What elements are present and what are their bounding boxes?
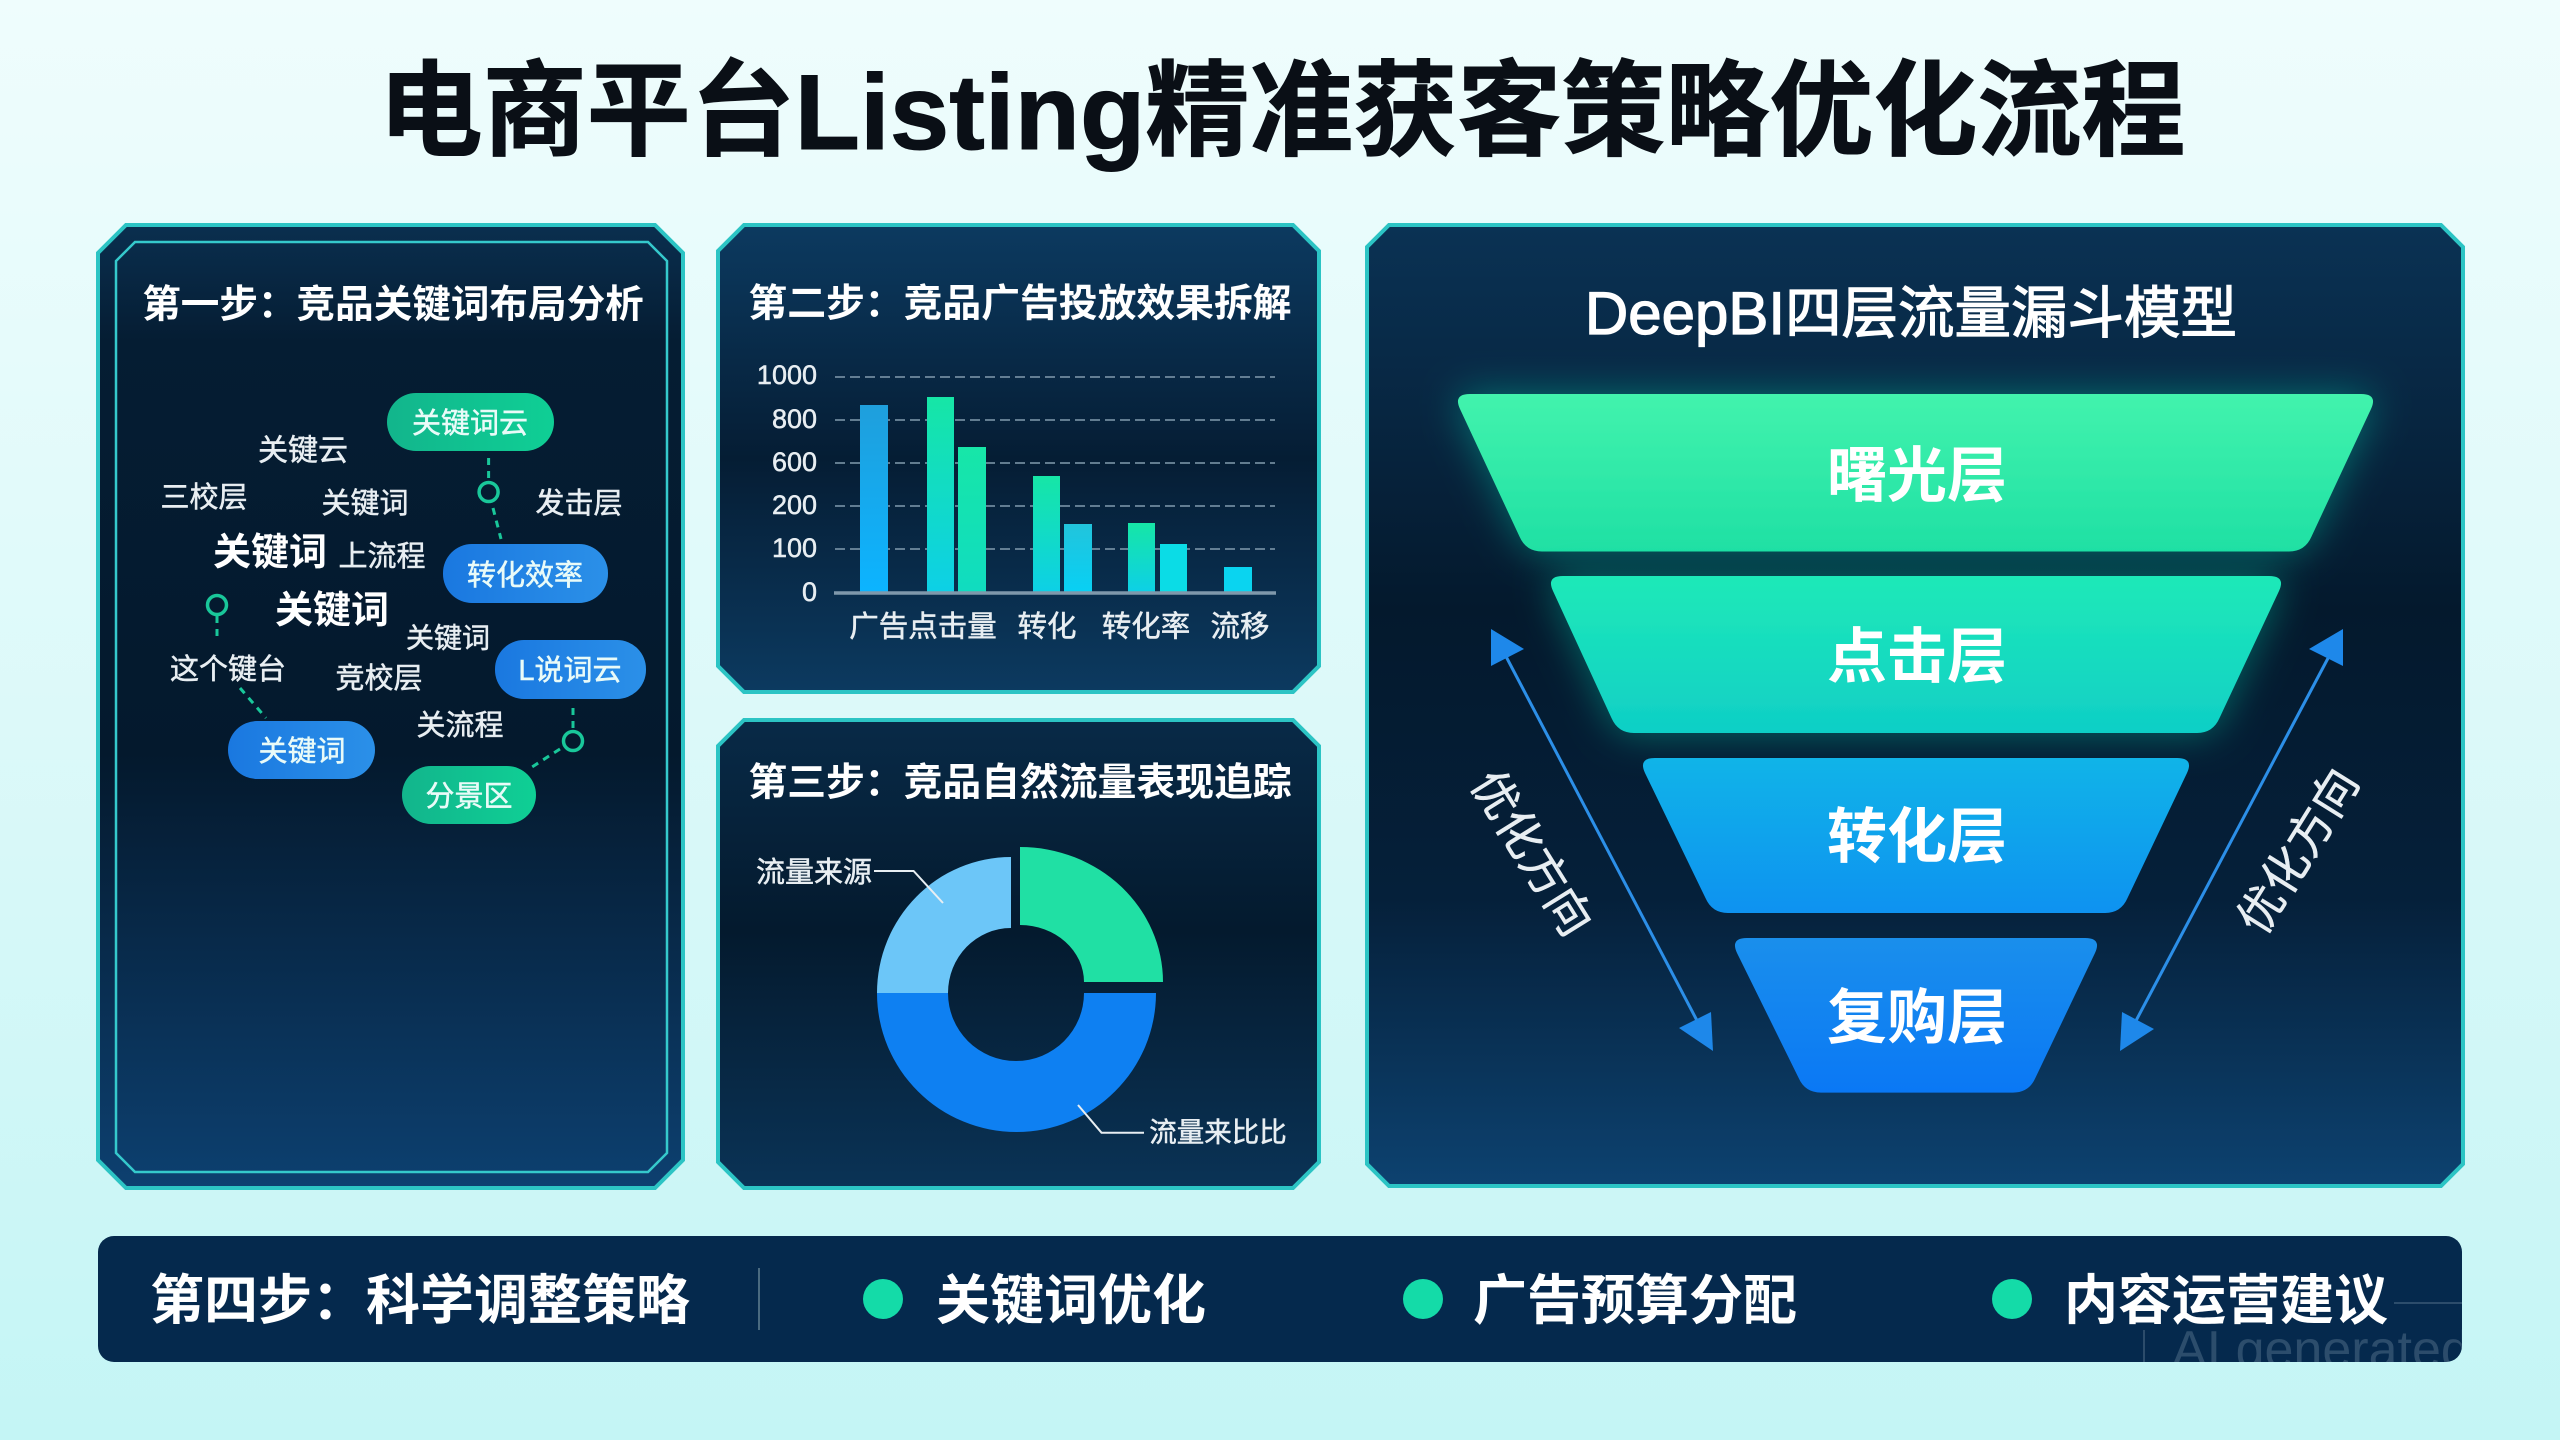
pill: segment: 分景区	[425, 781, 513, 813]
keyword cloud: 关键词	[406, 622, 490, 654]
panel: step 2 ad breakdown	[718, 225, 1319, 692]
item: content operations: 内容运营建议	[2064, 1271, 2388, 1331]
bar chart: 1000	[757, 360, 817, 390]
arrow: left optimisation direction	[1491, 629, 1713, 1051]
watermark: AI generated	[2172, 1321, 2470, 1379]
keyword cloud: 发击层	[535, 487, 623, 520]
keyword cloud: 竞校层	[335, 662, 423, 695]
heading: step 3: 第三步：竞品自然流量表现追踪	[748, 762, 1292, 804]
funnel layer: exposure: 曙光层	[1827, 442, 2007, 510]
bar chart: 广告点击量	[849, 610, 997, 644]
item: keyword optimisation: 关键词优化	[936, 1271, 1206, 1331]
panel: DeepBI funnel model	[1367, 225, 2463, 1186]
label: right direction: 优化方向	[2227, 759, 2369, 943]
keyword cloud: 关键词	[213, 532, 327, 574]
bar chart: 100	[772, 533, 817, 563]
pill: L keyword cloud	[495, 640, 646, 699]
panel: step 1 keyword layout	[98, 225, 683, 1188]
funnel layer: repurchase	[1735, 938, 2097, 1093]
funnel layer: conversion: 转化层	[1827, 804, 2007, 870]
keyword cloud: 关流程	[416, 709, 504, 742]
keyword cloud: 三校层	[160, 481, 248, 514]
keyword cloud: 上流程	[338, 540, 426, 573]
donut chart: 流量来源	[756, 856, 872, 889]
bar chart: 800	[772, 404, 817, 434]
funnel layer: repurchase: 复购层	[1827, 984, 2007, 1052]
donut chart: 流量来比比	[1149, 1116, 1287, 1148]
heading: funnel: DeepBI四层流量漏斗模型	[1585, 280, 2237, 346]
keyword cloud: 关键词	[321, 487, 409, 520]
heading: step 2: 第二步：竞品广告投放效果拆解	[748, 282, 1292, 326]
bar chart: 转化	[1017, 610, 1077, 644]
funnel layer: click: 点击层	[1827, 624, 2007, 690]
watermark	[2143, 1302, 2462, 1362]
bar chart: 0	[802, 577, 817, 607]
pill: L keyword cloud: L说词云	[518, 654, 622, 687]
bar chart: 600	[772, 447, 817, 477]
arrow: right optimisation direction	[2120, 629, 2343, 1051]
keyword cloud: 这个键台	[170, 653, 286, 686]
keyword cloud	[160, 434, 623, 767]
pill: conversion rate: 转化效率	[467, 559, 583, 592]
title: 电商平台Listing精准获客策略优化流程	[379, 52, 2185, 172]
donut chart	[756, 847, 1287, 1148]
label: left direction: 优化方向	[1461, 761, 1603, 945]
heading: step 4: 第四步：科学调整策略	[150, 1271, 690, 1331]
funnel layer: exposure	[1458, 394, 2373, 552]
bar chart	[757, 360, 1276, 644]
keyword cloud: 关键词	[275, 590, 389, 632]
pill: keyword: 关键词	[258, 735, 346, 768]
pill: keyword cloud	[387, 393, 554, 451]
bar chart: 转化率	[1102, 610, 1190, 644]
keyword cloud: 关键云	[258, 434, 348, 468]
pill: keyword cloud: 关键词云	[412, 407, 528, 440]
funnel layer: conversion	[1643, 758, 2189, 913]
funnel layer: click	[1551, 576, 2281, 733]
pill: keyword	[228, 721, 375, 779]
pill: segment	[402, 766, 536, 824]
bar chart: 流移	[1210, 610, 1270, 644]
bar chart: 200	[772, 490, 817, 520]
panel: step 4 bottom bar	[98, 1236, 2462, 1362]
heading: step 1: 第一步：竞品关键词布局分析	[142, 284, 644, 326]
item: ad budget: 广告预算分配	[1473, 1271, 1797, 1331]
pill: conversion rate	[443, 544, 608, 603]
panel: step 3 organic traffic	[718, 720, 1319, 1188]
